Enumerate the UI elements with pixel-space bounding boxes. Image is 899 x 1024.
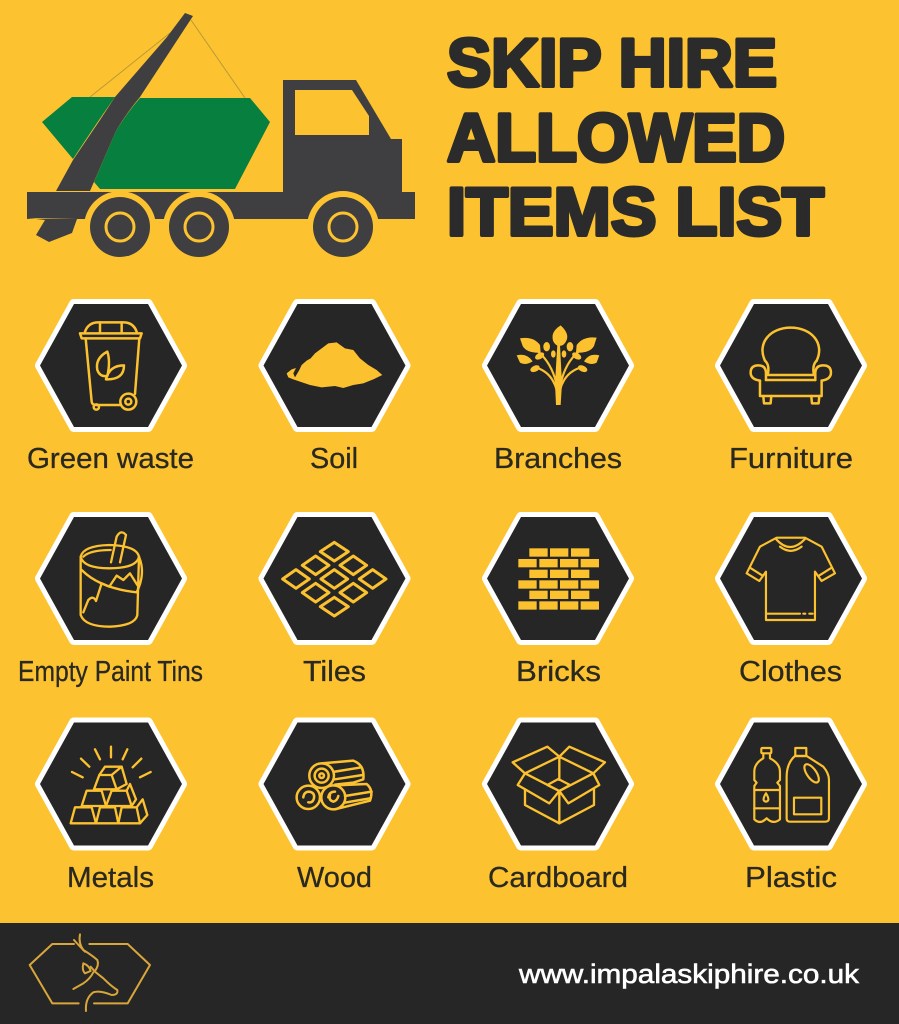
truck cab <box>283 80 402 193</box>
item: Bricks <box>487 517 629 688</box>
hexagon badge <box>720 304 862 427</box>
label: Metals <box>67 862 154 894</box>
icon: gold bars <box>71 747 151 823</box>
icon: paint tin with stick <box>81 532 142 627</box>
title: SKIP HIRE <box>447 25 777 101</box>
label: Branches <box>494 443 622 475</box>
hexagon badge <box>487 517 629 640</box>
icon: wheelie bin with leaves <box>80 322 142 410</box>
logo: hexagon with deer <box>30 934 150 1011</box>
hexagon badge <box>40 722 182 846</box>
hexagon badge <box>40 517 182 640</box>
hexagon badge <box>720 722 862 846</box>
label: Wood <box>297 862 372 894</box>
footer bar <box>0 923 899 1024</box>
item: Soil <box>264 304 406 475</box>
icon: brick wall <box>518 548 599 610</box>
label: Empty Paint Tins <box>18 656 203 688</box>
hexagon badge <box>487 722 629 846</box>
item: Wood <box>264 722 406 894</box>
item: Tiles <box>264 517 406 688</box>
label: Bricks <box>516 656 601 688</box>
label: Tiles <box>303 656 366 688</box>
label: Green waste <box>27 443 194 475</box>
website url: www.impalaskiphire.co.uk <box>518 959 860 989</box>
icon: armchair <box>751 328 831 403</box>
icon: open box <box>513 747 605 823</box>
hexagon badge <box>264 304 406 427</box>
label: Plastic <box>745 862 837 894</box>
label: Furniture <box>729 443 853 475</box>
icon: tile grid <box>283 542 386 616</box>
green skip <box>42 97 270 189</box>
item: Clothes <box>720 517 862 688</box>
item: Cardboard <box>487 722 629 894</box>
hexagon badge <box>40 304 182 427</box>
icon: plastic bottles <box>754 748 829 822</box>
hexagon badge <box>264 722 406 846</box>
hexagon badge <box>487 304 629 427</box>
item: Plastic <box>720 722 862 894</box>
title <box>447 25 824 250</box>
item: Furniture <box>720 304 862 475</box>
item: Empty Paint Tins <box>18 517 203 688</box>
illustration: skip loader truck <box>27 13 415 263</box>
icon: soil pile <box>287 342 382 388</box>
lifting arm <box>56 13 193 191</box>
icon: t-shirt <box>747 538 835 620</box>
wheels <box>84 191 379 263</box>
item: Green waste <box>27 304 194 475</box>
skip lifting chains <box>90 20 245 98</box>
label: Clothes <box>739 656 842 688</box>
title: ITEMS LIST <box>447 174 824 250</box>
item: Metals <box>40 722 182 894</box>
title: ALLOWED <box>447 100 785 176</box>
label: Cardboard <box>488 862 628 894</box>
item: Branches <box>487 304 629 475</box>
chassis <box>27 192 415 242</box>
icon: branches with leaves <box>517 325 599 405</box>
icon: stacked logs <box>297 761 372 809</box>
hexagon badge <box>264 517 406 640</box>
label: Soil <box>310 443 358 475</box>
hexagon badge <box>720 517 862 640</box>
